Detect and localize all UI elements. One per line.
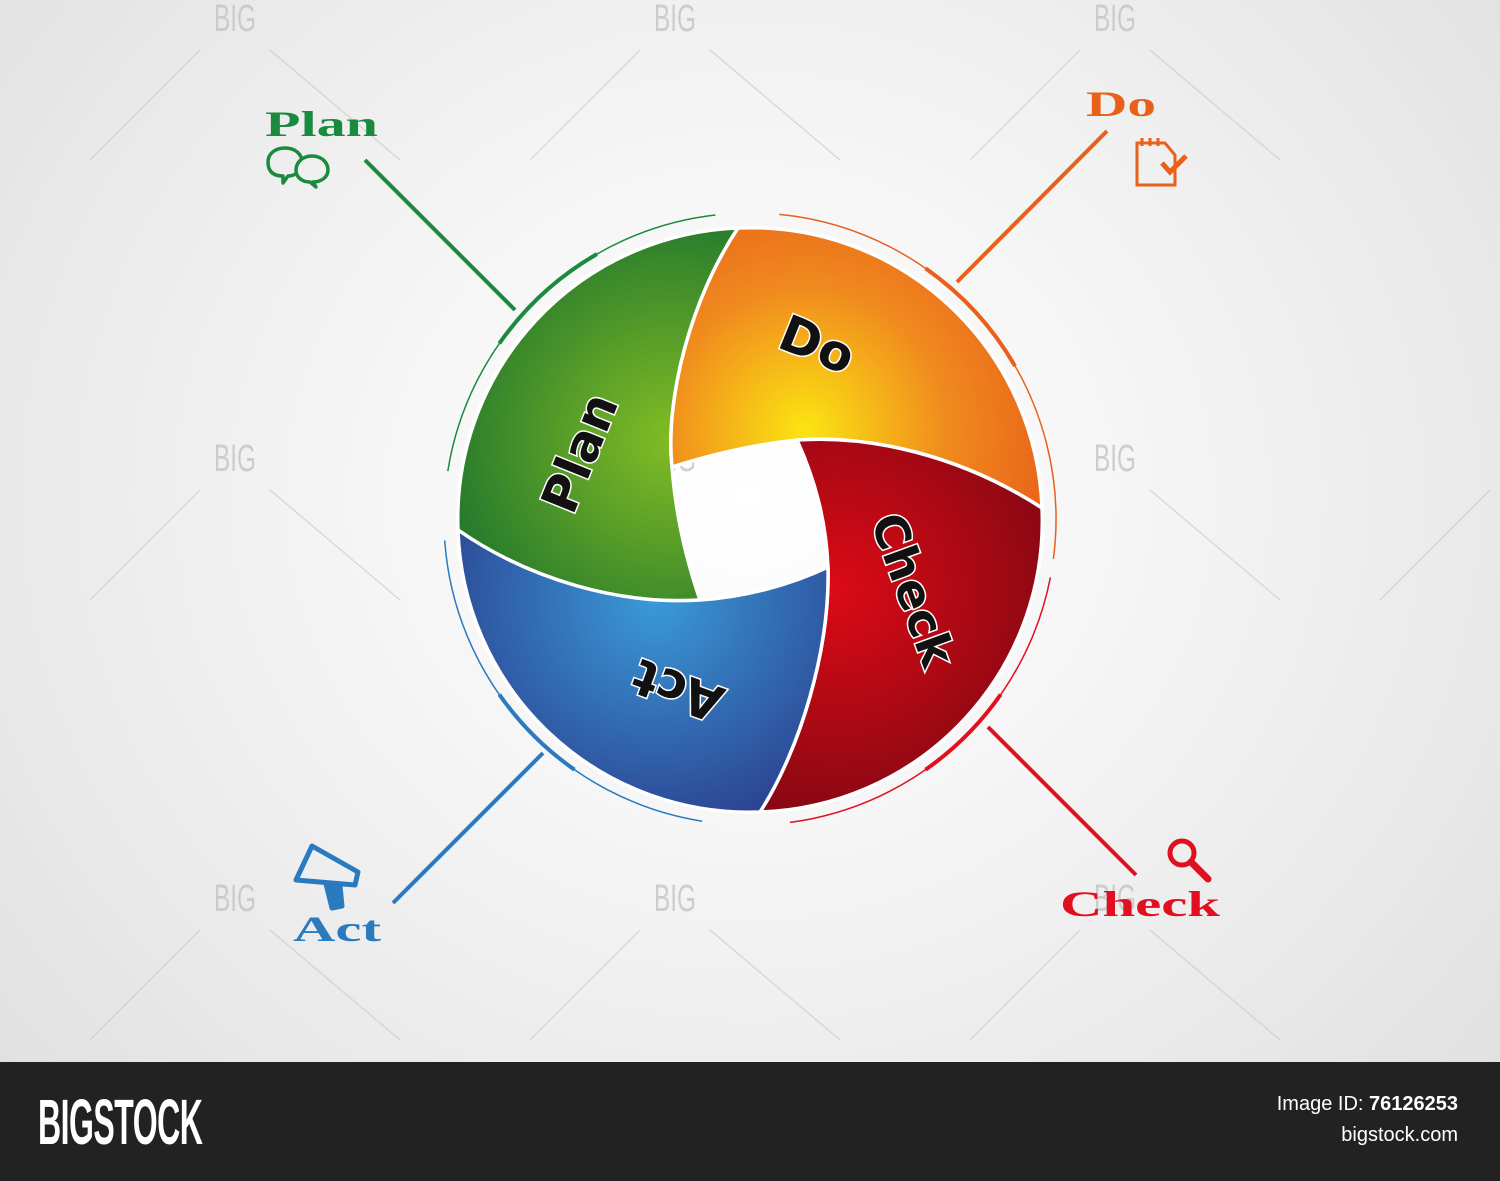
icon: notepad check <box>1137 138 1186 185</box>
footer image id: bigstock.com <box>1341 1124 1458 1146</box>
pdca wheel <box>458 228 1042 812</box>
footer bar <box>0 1062 1500 1181</box>
text: BIG <box>214 438 256 480</box>
icon: megaphone <box>296 846 358 908</box>
segment: do <box>671 228 1042 508</box>
segment: plan <box>458 228 738 601</box>
heading: Plan: Plan <box>265 104 378 144</box>
footer image id: Image ID: 76126253 <box>1277 1093 1458 1115</box>
footer image id <box>1277 1093 1458 1146</box>
text: BIG <box>654 438 696 480</box>
text: BIG <box>1094 878 1136 920</box>
text: BIG <box>214 878 256 920</box>
connector lines <box>365 131 1136 903</box>
outer arcs <box>445 214 1056 822</box>
segment: check <box>760 439 1042 812</box>
icon: chat bubbles <box>268 148 328 187</box>
heading: Act: Act <box>293 909 381 949</box>
text: BIG <box>1094 438 1136 480</box>
wheel labels <box>530 304 966 733</box>
label: Act: Act <box>625 647 731 733</box>
heading: Do: Do <box>1086 84 1156 124</box>
label: Check: Check <box>859 506 966 676</box>
label: Plan: Plan <box>530 385 630 521</box>
text: BIG <box>654 878 696 920</box>
footer logo: BIGSTOCK <box>38 1086 202 1158</box>
label: Do: Do <box>771 304 863 386</box>
segment: act <box>458 530 828 812</box>
heading: Check: Check <box>1060 884 1220 924</box>
icon: magnifier <box>1170 841 1208 879</box>
